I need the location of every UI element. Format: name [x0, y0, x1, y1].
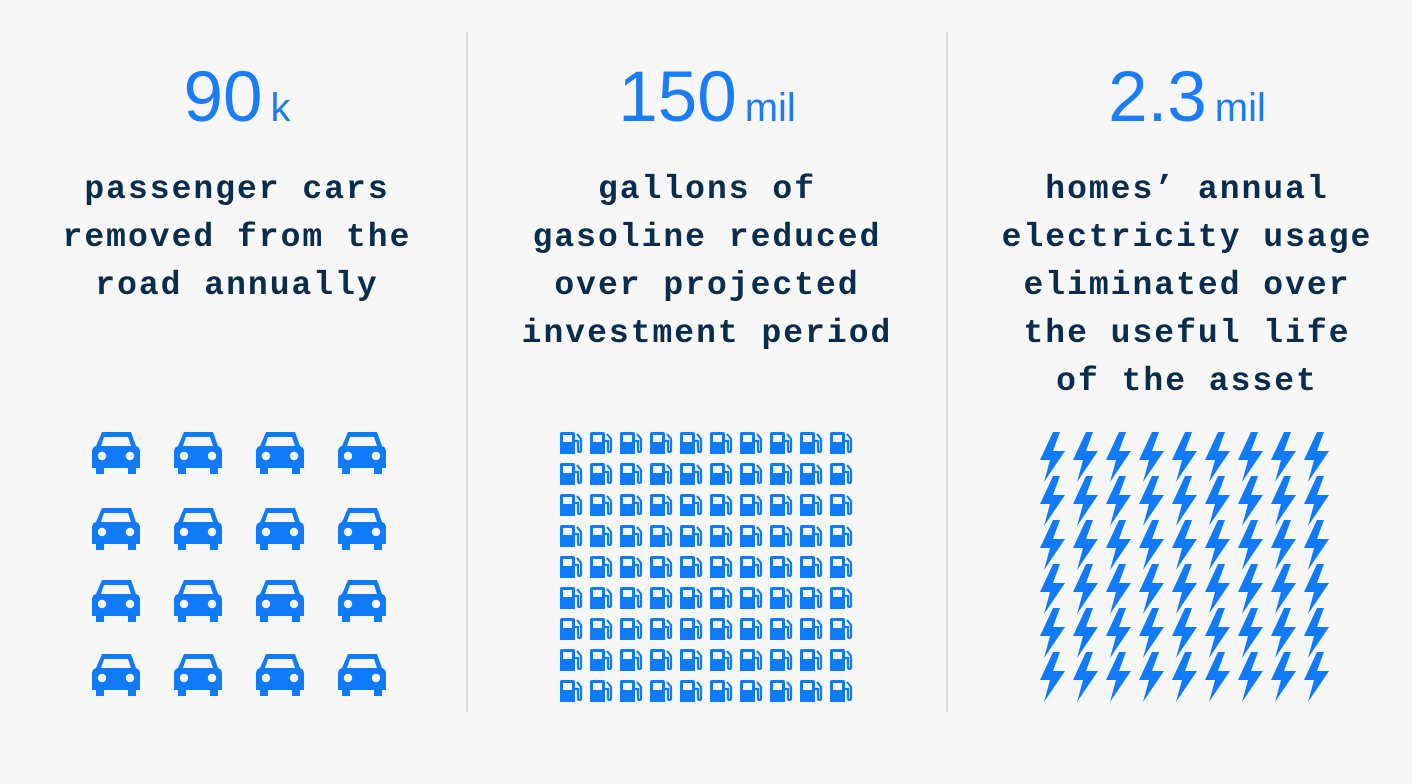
text: cars description: road annually [95, 267, 379, 304]
text: gasoline description: gasoline reduced [533, 219, 881, 256]
heading: 2.3 mil: 2.3mil [1108, 58, 1266, 137]
text: electricity description: of the asset [1056, 363, 1318, 400]
text: electricity description: the useful life [1023, 315, 1351, 352]
icon grid: cars [92, 432, 386, 696]
text: gasoline description [522, 171, 892, 352]
panel: gasoline [522, 58, 892, 352]
icon grid: lightning bolts [1040, 432, 1329, 702]
heading: 150 mil: 150mil [618, 58, 796, 137]
text: cars description: removed from the [63, 219, 411, 256]
text: electricity description: eliminated over [1023, 267, 1351, 304]
text: cars description: passenger cars [84, 171, 390, 208]
icon grid: fuel pumps [560, 432, 851, 702]
panel: electricity [1002, 58, 1372, 400]
panel: cars [63, 58, 411, 304]
heading: 90k: 90k [184, 58, 290, 137]
text: cars description [63, 171, 411, 304]
text: gasoline description: gallons of [598, 171, 816, 208]
text: electricity description: homes’ annual [1045, 171, 1329, 208]
text: gasoline description: investment period [522, 315, 892, 352]
text: gasoline description: over projected [554, 267, 860, 304]
text: electricity description [1002, 171, 1372, 400]
text: electricity description: electricity usage [1002, 219, 1372, 256]
